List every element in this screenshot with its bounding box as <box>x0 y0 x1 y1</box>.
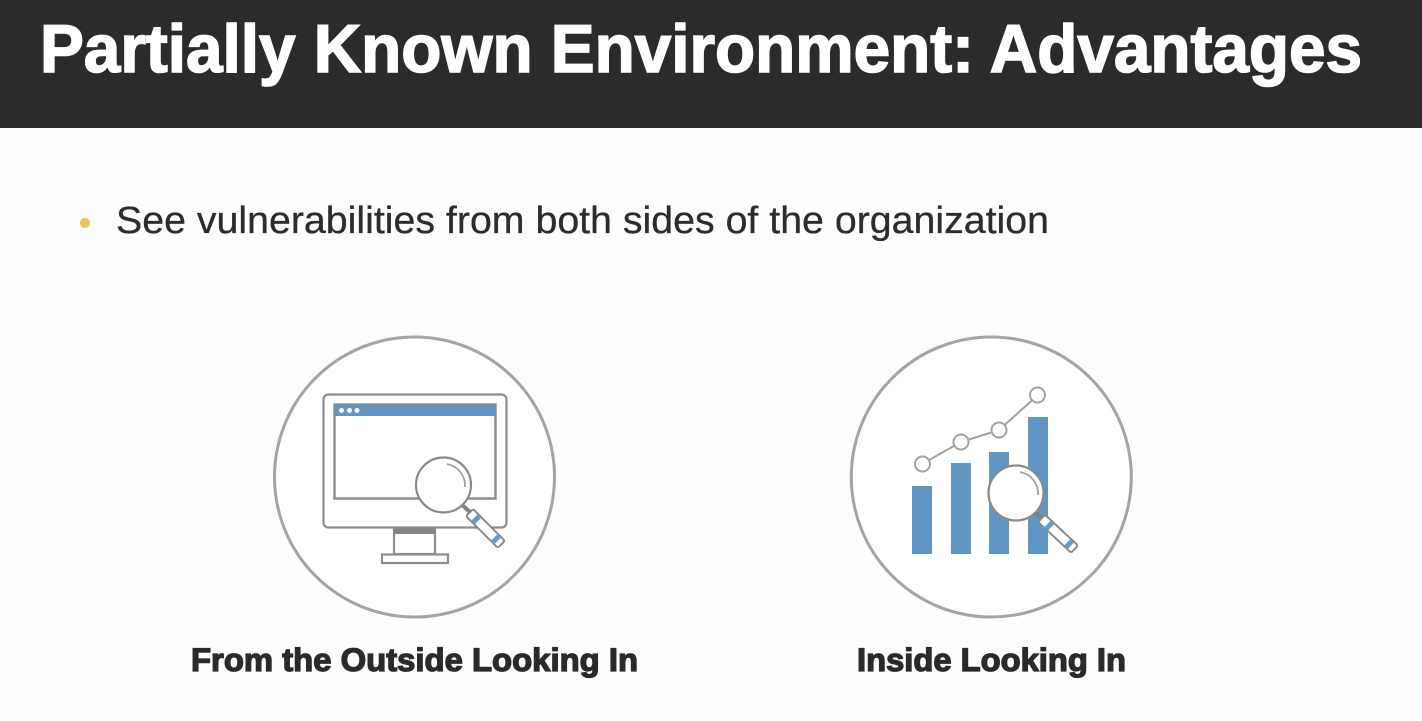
browser bar <box>335 405 496 416</box>
bullet point <box>80 200 1049 242</box>
title banner <box>0 0 1422 128</box>
bullet text: See vulnerabilities from both sides of the organization <box>116 200 1049 242</box>
trend line <box>915 388 1045 472</box>
label: from the outside: From the Outside Looking In <box>191 642 638 678</box>
icon: bar chart with magnifying glass <box>851 337 1131 617</box>
label: inside: Inside Looking In <box>857 642 1126 678</box>
magnifying glass <box>988 466 1078 553</box>
monitor <box>324 394 506 563</box>
bars <box>912 417 1048 554</box>
title: Partially Known Environment: Advantages <box>40 11 1362 87</box>
magnifying glass <box>416 458 505 548</box>
icon: monitor with magnifying glass <box>274 337 554 617</box>
